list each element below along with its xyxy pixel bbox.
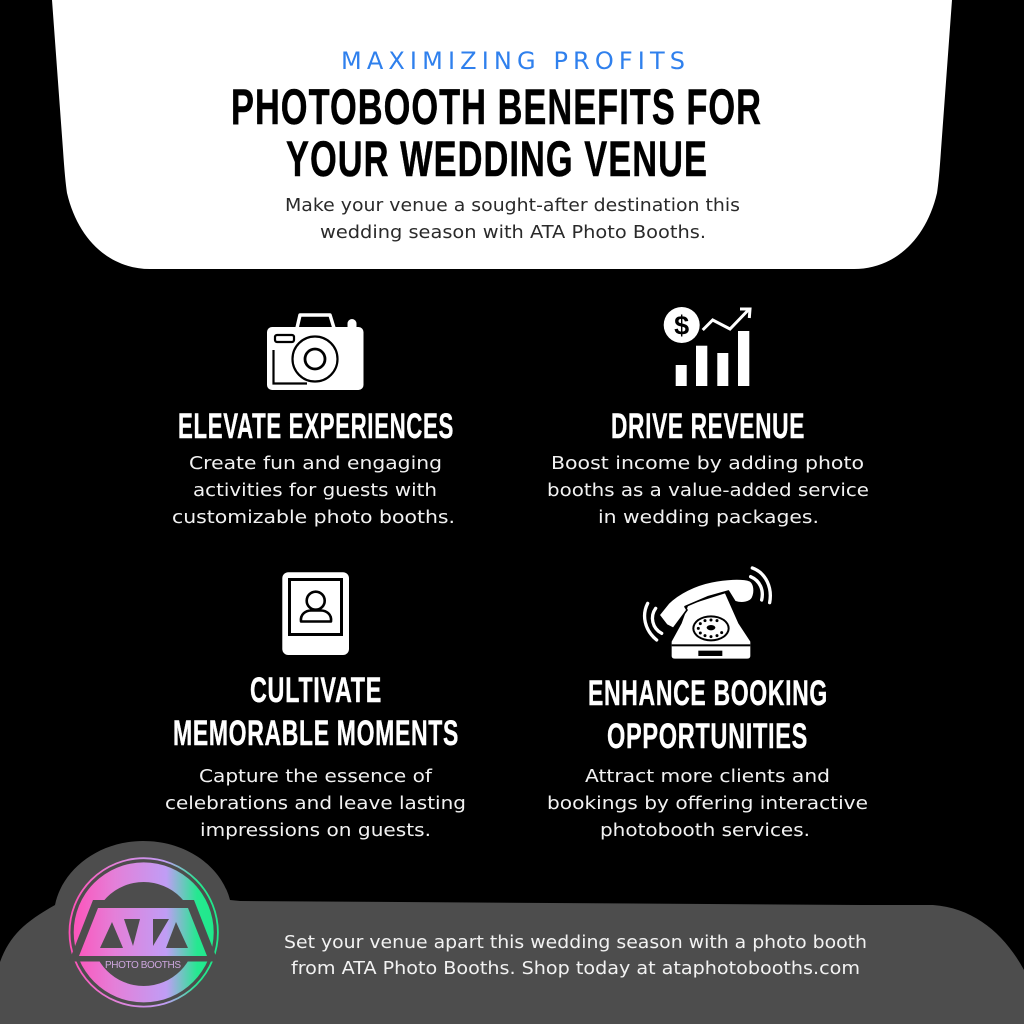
heading xyxy=(588,674,828,756)
header panel xyxy=(52,0,952,269)
body text xyxy=(172,453,455,528)
logo: ATA Photo Booths: PHOTO BOOTHS xyxy=(105,960,181,971)
icon: revenue chart: $ xyxy=(674,310,689,340)
body text: Boost income by adding photo xyxy=(551,453,864,474)
body text: Attract more clients and xyxy=(585,766,830,787)
icon: revenue chart xyxy=(664,307,750,386)
panel: elevate experiences xyxy=(172,315,455,528)
heading: OPPORTUNITIES xyxy=(607,717,808,756)
heading xyxy=(173,671,459,753)
heading: CULTIVATE xyxy=(250,671,382,710)
heading: ENHANCE BOOKING xyxy=(588,674,828,713)
panel: drive revenue xyxy=(547,307,869,528)
footer text: Set your venue apart this wedding season with a photo booth xyxy=(284,932,867,953)
body text xyxy=(165,766,466,841)
logo: ATA Photo Booths xyxy=(69,858,218,1007)
body text: booths as a value-added service xyxy=(547,480,869,501)
body text: bookings by offering interactive xyxy=(547,793,868,814)
body text: customizable photo booths. xyxy=(172,507,455,528)
panel: enhance booking opportunities xyxy=(547,568,868,841)
body text: impressions on guests. xyxy=(200,820,431,841)
title: PHOTOBOOTH BENEFITS FOR xyxy=(231,79,762,135)
footer panel xyxy=(0,841,1024,1024)
body text xyxy=(547,766,868,841)
body text: celebrations and leave lasting xyxy=(165,793,466,814)
title: YOUR WEDDING VENUE xyxy=(286,131,708,187)
eyebrow heading: MAXIMIZING PROFITS xyxy=(341,47,685,75)
icon: instant photo xyxy=(282,572,349,655)
title xyxy=(231,79,762,187)
heading: DRIVE REVENUE xyxy=(611,407,805,446)
body text: activities for guests with xyxy=(193,480,437,501)
body text: Create fun and engaging xyxy=(189,453,442,474)
icon: camera xyxy=(267,315,364,390)
body text: photobooth services. xyxy=(600,820,810,841)
heading: ELEVATE EXPERIENCES xyxy=(178,407,454,446)
icon: ringing telephone xyxy=(645,568,770,659)
body text xyxy=(547,453,869,528)
panel: cultivate memorable moments xyxy=(165,572,466,841)
subtitle xyxy=(285,195,740,243)
body text: Capture the essence of xyxy=(199,766,433,787)
subtitle: wedding season with ATA Photo Booths. xyxy=(320,222,706,243)
body text: in wedding packages. xyxy=(598,507,819,528)
subtitle: Make your venue a sought-after destination this xyxy=(285,195,740,216)
footer text: from ATA Photo Booths. Shop today at ataphotobooths.com xyxy=(291,958,860,979)
heading: MEMORABLE MOMENTS xyxy=(173,714,459,753)
footer text xyxy=(284,932,867,979)
